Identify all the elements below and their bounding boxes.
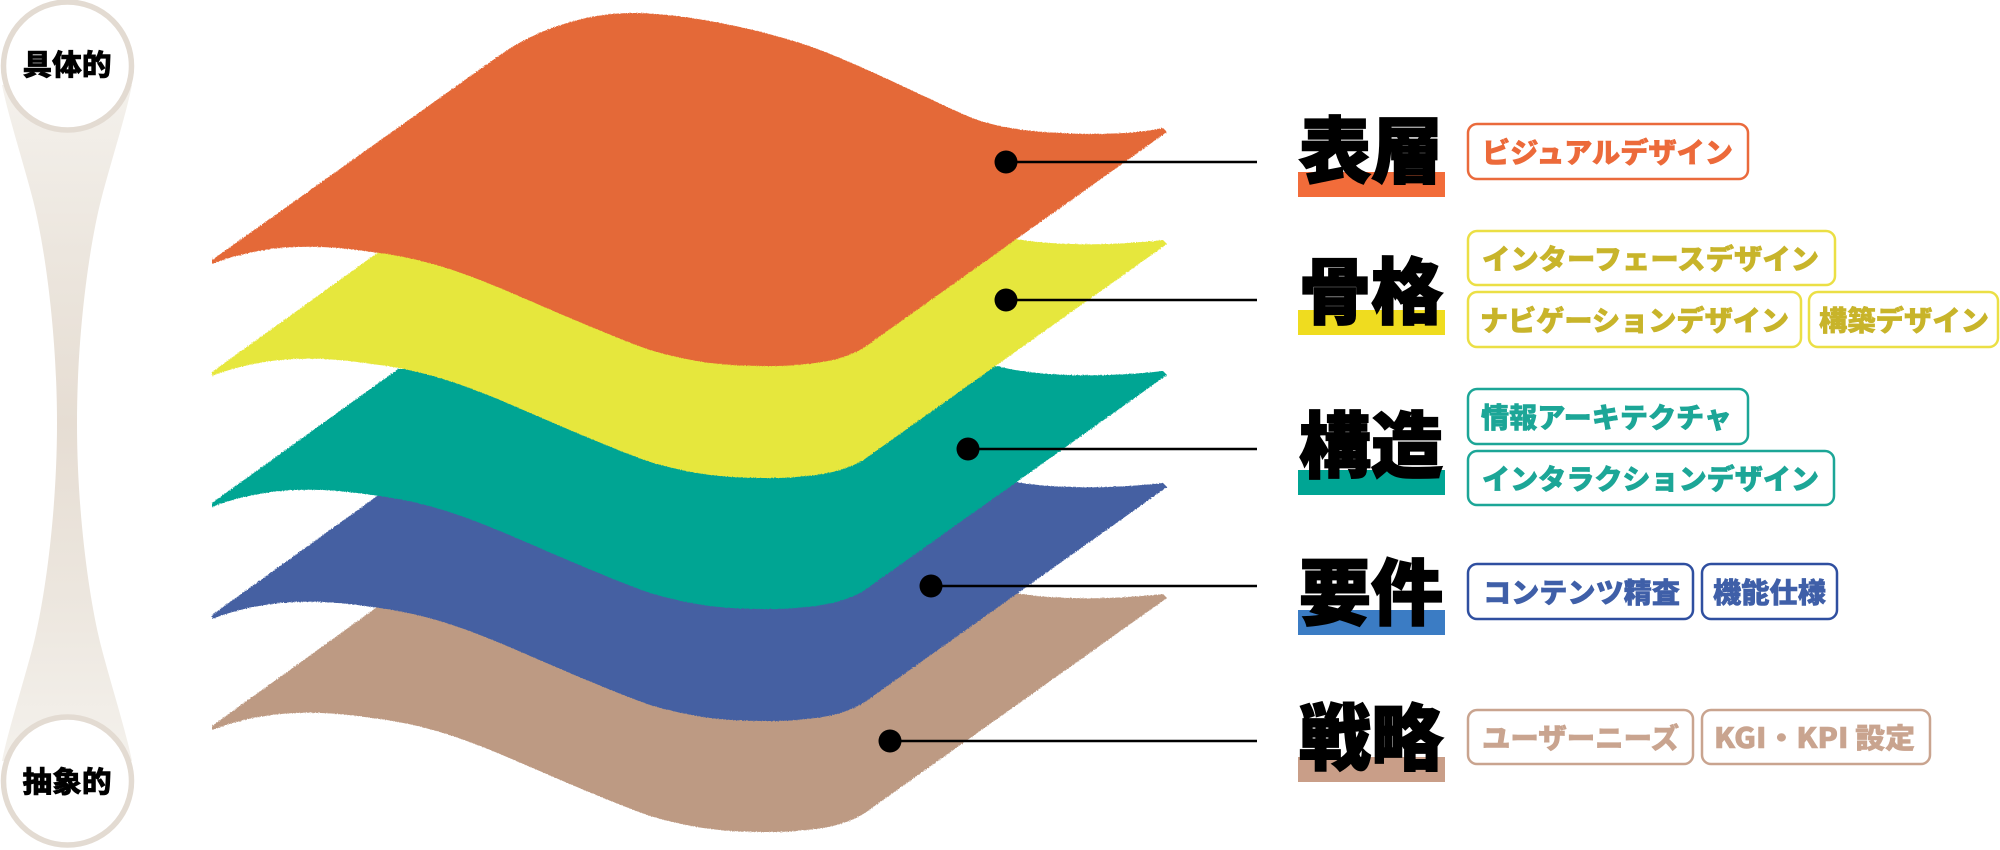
tag: information architecture [1468, 389, 1748, 444]
tag: visual design: ビジュアルデザイン [1482, 132, 1733, 172]
tag: content requirements: コンテンツ精査 [1483, 572, 1680, 612]
stacked wave layers [212, 13, 1167, 832]
tag: KGI KPI setting: KGI・KPI 設定 [1714, 717, 1915, 757]
scale column: concrete to abstract [2, 2, 132, 845]
layer: surface [212, 13, 1167, 366]
leader line: structure [956, 438, 1257, 460]
tag: interaction design: インタラクションデザイン [1482, 458, 1819, 498]
tag: navigation design: ナビゲーションデザイン [1480, 300, 1789, 340]
label: concrete: 具体的 [22, 42, 112, 84]
tag: interface design: インターフェースデザイン [1482, 238, 1819, 278]
leader line: strategy [878, 730, 1257, 752]
row: requirements [920, 535, 1837, 640]
circle: concrete [4, 2, 132, 130]
layer: structure [212, 366, 1167, 609]
tag: user needs: ユーザーニーズ [1482, 717, 1679, 757]
row: surface [994, 93, 1748, 198]
tag: functional spec [1702, 564, 1837, 619]
tag: interface design [1468, 231, 1835, 285]
tag: KGI KPI setting [1702, 710, 1930, 764]
tag: interaction design [1468, 451, 1834, 505]
column shape [2, 85, 132, 761]
heading: requirements: 要件 [1299, 535, 1443, 640]
heading: strategy: 戦略 [1299, 680, 1443, 785]
label: abstract: 抽象的 [22, 759, 112, 801]
tag: navigation design [1468, 292, 1801, 347]
row: skeleton [994, 231, 1998, 347]
layer: strategy [212, 589, 1167, 832]
heading: surface: 表層 [1299, 93, 1443, 198]
tag: user needs [1468, 710, 1693, 764]
tag: content requirements [1468, 564, 1693, 619]
leader line: surface [994, 150, 1257, 174]
row: structure [956, 388, 1834, 505]
circle: abstract [4, 717, 132, 845]
leader line: skeleton [994, 288, 1257, 312]
heading: skeleton: 骨格 [1299, 234, 1443, 339]
tag: visual design [1468, 124, 1748, 179]
tag: information architecture: 情報アーキテクチャ [1481, 396, 1732, 436]
row: strategy [878, 680, 1930, 785]
tag: functional spec: 機能仕様 [1713, 572, 1826, 612]
layer: skeleton [212, 235, 1167, 478]
heading: structure: 構造 [1299, 388, 1443, 493]
tag: construction design: 構築デザイン [1819, 300, 1989, 340]
leader line: requirements [920, 574, 1257, 598]
tag: construction design [1809, 292, 1998, 347]
layer: requirements [212, 478, 1167, 721]
